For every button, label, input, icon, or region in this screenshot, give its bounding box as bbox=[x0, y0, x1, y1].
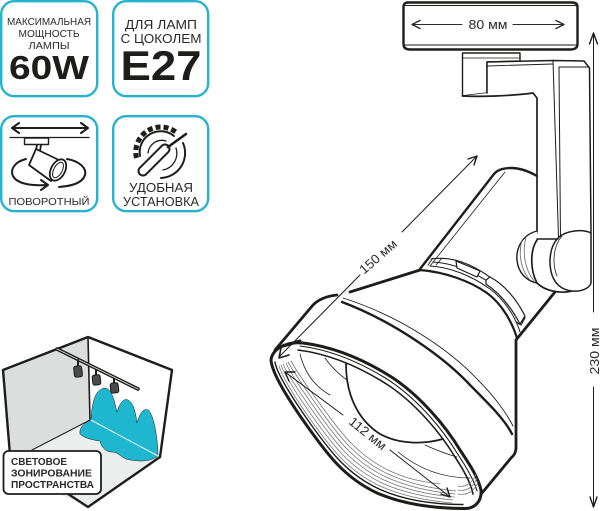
text: socket caption bbox=[120, 17, 202, 46]
dimension: 150 mm bbox=[279, 156, 477, 358]
panel: easy installation bbox=[113, 116, 208, 211]
panel: light zoning room bbox=[3, 337, 172, 507]
text: installation label bbox=[123, 180, 199, 209]
zoning label bbox=[4, 451, 101, 494]
text: installation label: УСТАНОВКА bbox=[123, 194, 199, 209]
track rail with three spots bbox=[57, 349, 138, 393]
text: 60W value: 60W bbox=[9, 49, 90, 86]
lamp bulb bbox=[346, 364, 443, 443]
icon: gear and screwdriver bbox=[136, 127, 186, 178]
blue light zones bbox=[80, 388, 158, 461]
text: power caption: МОЩНОСТЬ bbox=[18, 29, 80, 40]
room walls and floor bbox=[3, 337, 172, 507]
bracket arm bbox=[462, 53, 591, 250]
shade band bbox=[342, 302, 512, 434]
dimension: 80 mm bbox=[412, 17, 564, 32]
dimension: 112 mm bbox=[285, 372, 450, 497]
zoning label: СВЕТОВОЕ bbox=[11, 456, 67, 468]
panel: rotatable bbox=[1, 116, 97, 211]
lamp rear cone bbox=[420, 168, 537, 269]
reflector inner lines bbox=[300, 354, 470, 478]
text: installation label: УДОБНАЯ bbox=[129, 180, 193, 195]
track lamp drawing bbox=[271, 2, 591, 508]
dimension: 80 mm: 80 мм bbox=[468, 17, 508, 32]
pivot knuckle bbox=[517, 231, 591, 292]
dimension: 150 mm: 150 мм bbox=[356, 236, 400, 277]
panel: maximum lamp power 60W bbox=[1, 1, 97, 96]
text: E27 value: E27 bbox=[120, 42, 202, 89]
text: rotatable label: ПОВОРОТНЫЙ bbox=[8, 195, 90, 208]
panel: E27 socket bbox=[113, 1, 208, 96]
inner rim lines bbox=[300, 346, 477, 491]
lamp opening rim bbox=[271, 343, 481, 508]
text: power caption bbox=[7, 17, 91, 52]
text: power caption: ЛАМПЫ bbox=[28, 41, 70, 52]
zoning label: ПРОСТРАНСТВА bbox=[11, 479, 94, 491]
adjustment collar bbox=[420, 258, 525, 338]
text: socket caption: С ЦОКОЛЕМ bbox=[120, 31, 202, 46]
text: power caption: МАКСИМАЛЬНАЯ bbox=[7, 17, 91, 28]
dimension: 112 mm: 112 мм bbox=[346, 414, 390, 453]
dimension: 230 mm bbox=[587, 33, 600, 507]
zoning label: ЗОНИРОВАНИЕ bbox=[11, 468, 92, 480]
icon: rotating spot lamp bbox=[10, 123, 89, 190]
lamp front shade outline bbox=[275, 270, 555, 493]
reflector ribs bbox=[279, 361, 478, 503]
text: socket caption: ДЛЯ ЛАМП bbox=[125, 17, 197, 32]
track adapter plate bbox=[404, 2, 578, 50]
